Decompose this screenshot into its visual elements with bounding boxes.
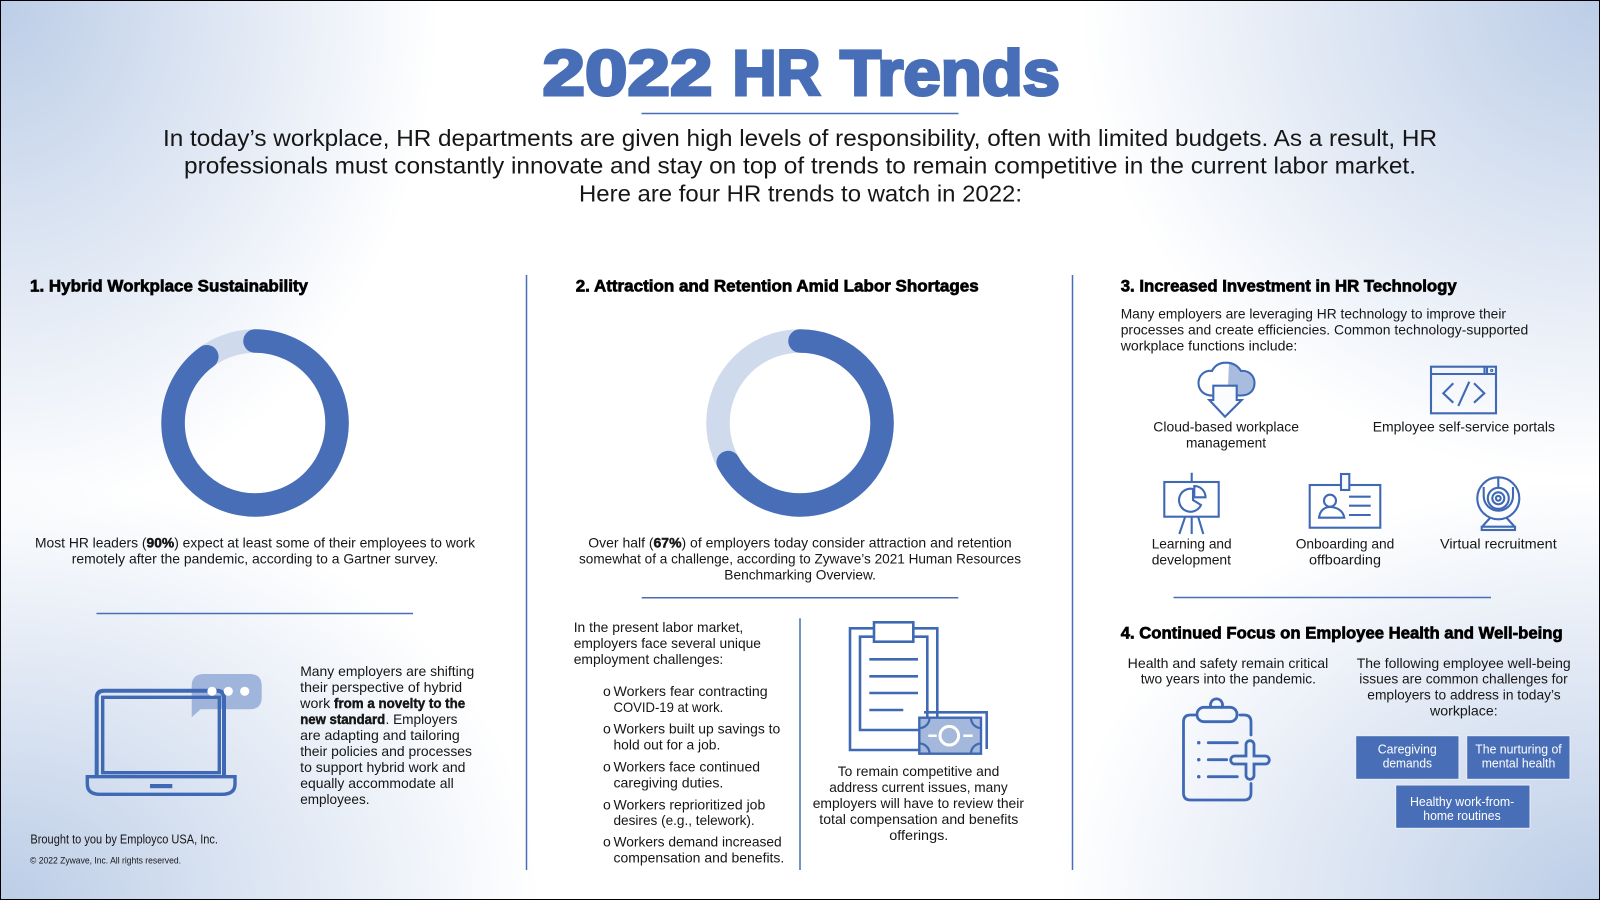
health text — [1128, 655, 1328, 687]
hybrid work text: their policies and processes — [300, 743, 472, 759]
heading 4: 4. Continued Focus on Employee Health and Well-being — [1121, 623, 1563, 642]
label: onboarding — [1296, 535, 1394, 567]
heading 2: 2. Attraction and Retention Amid Labor Shortages — [576, 276, 979, 296]
box: caregiving demands: demands — [1383, 756, 1432, 770]
title: 2022 — [542, 37, 712, 109]
technology intro: workplace functions include: — [1120, 338, 1297, 354]
label: learning — [1152, 535, 1232, 567]
compensation text: To remain competitive and — [838, 763, 999, 779]
donut caption — [579, 535, 1021, 583]
technology intro: processes and create efficiencies. Common technology-supported — [1121, 322, 1528, 338]
label: cloud — [1153, 419, 1299, 451]
icon: clipboard plus — [1184, 699, 1269, 800]
hybrid work text: work — [299, 695, 331, 711]
box: mental health: The nurturing of — [1475, 742, 1562, 756]
label: learning: development — [1152, 551, 1231, 567]
donut chart 90% — [173, 341, 337, 505]
technology intro: Many employers are leveraging HR technology to improve their — [1121, 306, 1506, 322]
heading 1: 1. Hybrid Workplace Sustainability — [30, 276, 309, 296]
intro text — [163, 125, 1437, 206]
donut caption: Most HR leaders (90%) expect at least some of their employees to work — [35, 535, 476, 551]
box: caregiving demands — [1356, 736, 1459, 779]
well-being text: issues are common challenges for — [1359, 671, 1568, 687]
hybrid work text: Many employers are shifting — [300, 663, 474, 679]
challenges list: Workers built up savings to — [614, 721, 780, 737]
donut caption: Over half (67%) of employers today consider attraction and retention — [588, 535, 1012, 551]
challenges list: Workers reprioritized job — [614, 796, 766, 812]
challenges list: Workers face continued — [614, 758, 760, 774]
challenges list: o — [603, 834, 611, 850]
icon: id badge — [1310, 474, 1380, 528]
hybrid work text: equally accommodate all — [300, 775, 454, 791]
compensation text: total compensation and benefits — [819, 811, 1018, 827]
box: mental health — [1467, 736, 1570, 779]
box: caregiving demands: Caregiving — [1378, 742, 1437, 756]
box: work-from-home routines: Healthy work-from- — [1410, 795, 1514, 809]
icon: webcam — [1477, 477, 1519, 530]
donut caption: Benchmarking Overview. — [724, 567, 876, 583]
label: onboarding: Onboarding and — [1296, 535, 1394, 551]
panel: trend 1 hybrid workplace — [30, 276, 476, 866]
footer credit: © 2022 Zywave, Inc. All rights reserved. — [30, 855, 181, 866]
challenges intro — [574, 619, 761, 667]
intro text: professionals must constantly innovate and stay on top of trends to remain competitive in the current labor market. — [184, 152, 1416, 178]
intro text: Here are four HR trends to watch in 2022: — [579, 180, 1022, 206]
challenges intro: employment challenges: — [574, 651, 723, 667]
hybrid work text: new standard — [300, 711, 385, 727]
well-being text: employers to address in today’s — [1367, 687, 1561, 703]
label: virtual recruitment: Virtual recruitment — [1440, 535, 1557, 551]
well-being text: workplace: — [1429, 703, 1498, 719]
hybrid work text: employees. — [300, 791, 370, 807]
challenges list: o — [603, 721, 611, 737]
challenges list: caregiving duties. — [614, 774, 723, 790]
hybrid work text: are adapting and tailoring — [300, 727, 460, 743]
challenges list: COVID-19 at work. — [614, 699, 723, 715]
footer credit: Brought to you by Employco USA, Inc. — [30, 831, 218, 846]
well-being text — [1357, 655, 1571, 719]
challenges intro: employers face several unique — [574, 635, 761, 651]
challenges list: o — [603, 796, 611, 812]
donut chart 67% — [718, 341, 882, 505]
hybrid work text: their perspective of hybrid — [300, 679, 462, 695]
label: cloud: management — [1186, 435, 1266, 451]
title: HR — [732, 37, 820, 109]
box: work-from-home routines — [1396, 785, 1530, 828]
challenges list: desires (e.g., telework). — [614, 812, 755, 828]
compensation text: offerings. — [889, 827, 948, 843]
panel: trend 4 health and well-being — [1121, 623, 1571, 828]
box: mental health: mental health — [1482, 756, 1555, 770]
donut caption — [35, 535, 476, 567]
donut caption: remotely after the pandemic, according to a Gartner survey. — [72, 551, 438, 567]
intro text: In today’s workplace, HR departments are given high levels of responsibility, often with limited budgets. As a result, HR — [163, 125, 1437, 151]
challenges intro: In the present labor market, — [574, 619, 743, 635]
heading 3: 3. Increased Investment in HR Technology — [1121, 276, 1457, 296]
icon: laptop with speech bubble — [87, 674, 262, 794]
label: portals: Employee self-service portals — [1373, 419, 1555, 435]
label: learning: Learning and — [1152, 535, 1232, 551]
box: work-from-home routines: home routines — [1423, 809, 1501, 823]
label: cloud: Cloud-based workplace — [1153, 419, 1299, 435]
panel: trend 3 HR technology — [1120, 276, 1557, 567]
footer credit — [30, 831, 218, 866]
health text: two years into the pandemic. — [1141, 671, 1316, 687]
challenges list: o — [603, 758, 611, 774]
compensation text: employers will have to review their — [813, 795, 1024, 811]
challenges list: compensation and benefits. — [614, 850, 784, 866]
title: Trends — [840, 37, 1060, 109]
panel: trend 2 attraction and retention — [574, 276, 1024, 870]
hybrid work text: from a novelty to the — [334, 695, 465, 711]
challenges list: o — [603, 683, 611, 699]
icon: presentation board — [1164, 473, 1219, 534]
challenges list: Workers fear contracting — [614, 683, 768, 699]
donut caption: somewhat of a challenge, according to Zywave’s 2021 Human Resources — [579, 551, 1021, 567]
challenges list: hold out for a job. — [614, 737, 720, 753]
icon: cloud download — [1198, 363, 1254, 417]
compensation text — [813, 763, 1024, 843]
hybrid work text — [299, 663, 474, 807]
icon: clipboard with money — [850, 622, 987, 754]
well-being text: The following employee well-being — [1357, 655, 1571, 671]
health text: Health and safety remain critical — [1128, 655, 1328, 671]
hybrid work text: to support hybrid work and — [300, 759, 466, 775]
challenges list — [603, 683, 784, 866]
label: onboarding: offboarding — [1309, 551, 1381, 567]
compensation text: address current issues, many — [829, 779, 1008, 795]
challenges list: Workers demand increased — [614, 834, 782, 850]
title — [542, 37, 1060, 109]
icon: code window — [1431, 367, 1496, 413]
hybrid work text: . Employers — [386, 711, 458, 727]
technology intro — [1120, 306, 1528, 354]
